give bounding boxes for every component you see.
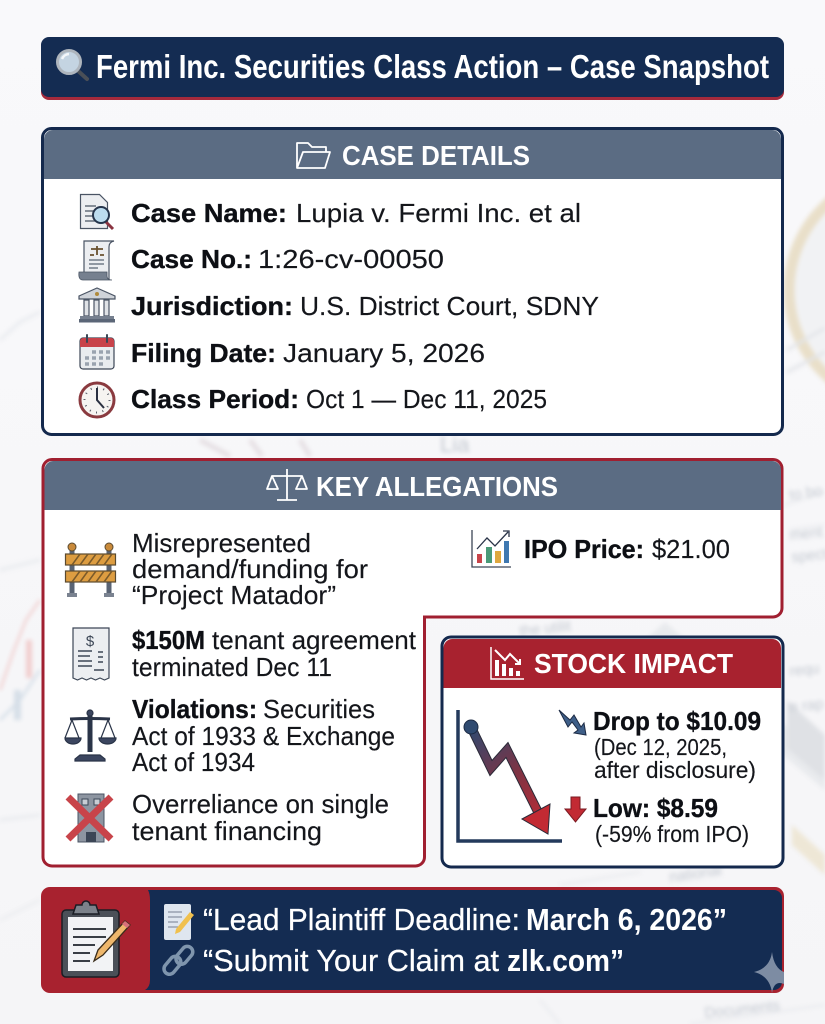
title banner	[41, 37, 784, 100]
icon: magnifying glass	[58, 50, 87, 79]
text: drop to: Drop to $10.09	[593, 706, 761, 736]
background: blurred financial documents and magnifier: requ	[789, 660, 820, 680]
icon: sparkle	[754, 952, 784, 993]
icon: clock	[80, 383, 114, 417]
row: case number	[131, 244, 444, 274]
background: blurred financial documents and magnifier: ment	[789, 523, 824, 544]
text: tenant agreement: terminated Dec 11	[132, 652, 332, 682]
text: tenant agreement: tenant agreement	[212, 625, 417, 655]
text: overreliance	[132, 789, 389, 846]
text: violations: Act of 1933 & Exchange	[132, 721, 395, 751]
text: low: Low: $8.59	[593, 793, 718, 823]
icon: chain link	[162, 944, 195, 977]
icon: rising bar chart	[472, 530, 511, 567]
icon: receipt: $	[86, 633, 95, 650]
text: project matador: “Project Matador”	[132, 580, 336, 610]
text: violations: Act of 1934	[132, 747, 255, 777]
icon: receipt	[73, 628, 109, 680]
text: drop to: (Dec 12, 2025,	[594, 734, 727, 760]
text: drop to: after disclosure)	[594, 757, 756, 783]
background: blurred financial documents and magnifier: the utilit	[519, 618, 573, 640]
row: jurisdiction: U.S. District Court, SDNY	[300, 291, 599, 321]
text: project matador: Misrepresented	[132, 528, 311, 558]
text: violations	[132, 694, 395, 777]
text: lead plaintiff deadline	[203, 902, 727, 937]
call to action banner	[41, 887, 784, 993]
panel: stock impact	[442, 637, 783, 867]
text: lead plaintiff deadline: “Lead Plaintiff Deadline:	[203, 902, 520, 937]
heading: case details: CASE DETAILS	[342, 140, 530, 171]
row: filing date: Filing Date:	[131, 338, 276, 368]
icon: clipboard and pencil	[62, 901, 130, 977]
chart: falling stock line	[458, 710, 562, 841]
text: ipo price: $21.00	[652, 534, 730, 564]
background: blurred financial documents and magnifier: n rap	[789, 695, 824, 716]
text: tenant agreement	[132, 625, 417, 682]
icon: memo	[164, 904, 194, 940]
text: project matador: demand/funding for	[132, 554, 368, 584]
icon: courthouse	[79, 288, 115, 322]
background: blurred financial documents and magnifier: to bo	[788, 482, 824, 504]
icon: construction barrier	[66, 543, 116, 596]
text: project matador	[132, 528, 368, 610]
icon: crossed-out building	[68, 794, 111, 842]
text: low	[593, 793, 749, 847]
row: case number: 1:26-cv-00050	[258, 244, 444, 274]
row: jurisdiction: Jurisdiction:	[131, 291, 293, 321]
row: case name: Case Name:	[131, 198, 287, 228]
text: drop to	[593, 706, 761, 783]
row: class period	[131, 384, 547, 414]
heading: stock impact: STOCK IMPACT	[534, 648, 733, 679]
row: class period: Oct 1 — Dec 11, 2025	[306, 384, 547, 414]
background: blurred financial documents and magnifier: national	[668, 862, 723, 886]
icon: red down arrow	[565, 797, 586, 822]
text: submit your claim: zlk.com”	[507, 943, 624, 978]
text: overreliance: Overreliance on single	[132, 789, 389, 819]
panel: case details	[42, 128, 782, 434]
text: submit your claim: “Submit Your Claim at	[203, 943, 499, 978]
text: tenant agreement: $150M	[132, 625, 205, 655]
background: blurred financial documents and magnifier: Documents	[704, 997, 781, 1022]
row: jurisdiction	[131, 291, 599, 321]
row: filing date: January 5, 2026	[283, 338, 485, 368]
text: lead plaintiff deadline: March 6, 2026”	[526, 902, 727, 937]
text: ipo price: IPO Price:	[524, 534, 644, 564]
row: case name: Lupia v. Fermi Inc. et al	[296, 198, 581, 228]
text: violations: Violations:	[132, 694, 257, 724]
row: case name	[131, 198, 581, 228]
row: case number: Case No.:	[131, 244, 252, 274]
text: low: (-59% from IPO)	[595, 821, 749, 847]
icon: small falling arrow	[559, 710, 586, 735]
background: blurred financial documents and magnifier: Lia	[440, 432, 470, 457]
row: class period: Class Period:	[131, 384, 299, 414]
icon: legal scroll	[79, 241, 114, 280]
icon: scales of justice	[65, 710, 116, 761]
text: ipo price	[524, 534, 730, 564]
text: violations: Securities	[263, 694, 375, 724]
icon: calendar	[80, 335, 114, 369]
icon: document with magnifier	[80, 194, 113, 229]
heading: key allegations: KEY ALLEGATIONS	[316, 471, 558, 502]
panel: key allegations	[43, 460, 782, 866]
text: overreliance: tenant financing	[132, 816, 322, 846]
row: filing date	[131, 338, 485, 368]
